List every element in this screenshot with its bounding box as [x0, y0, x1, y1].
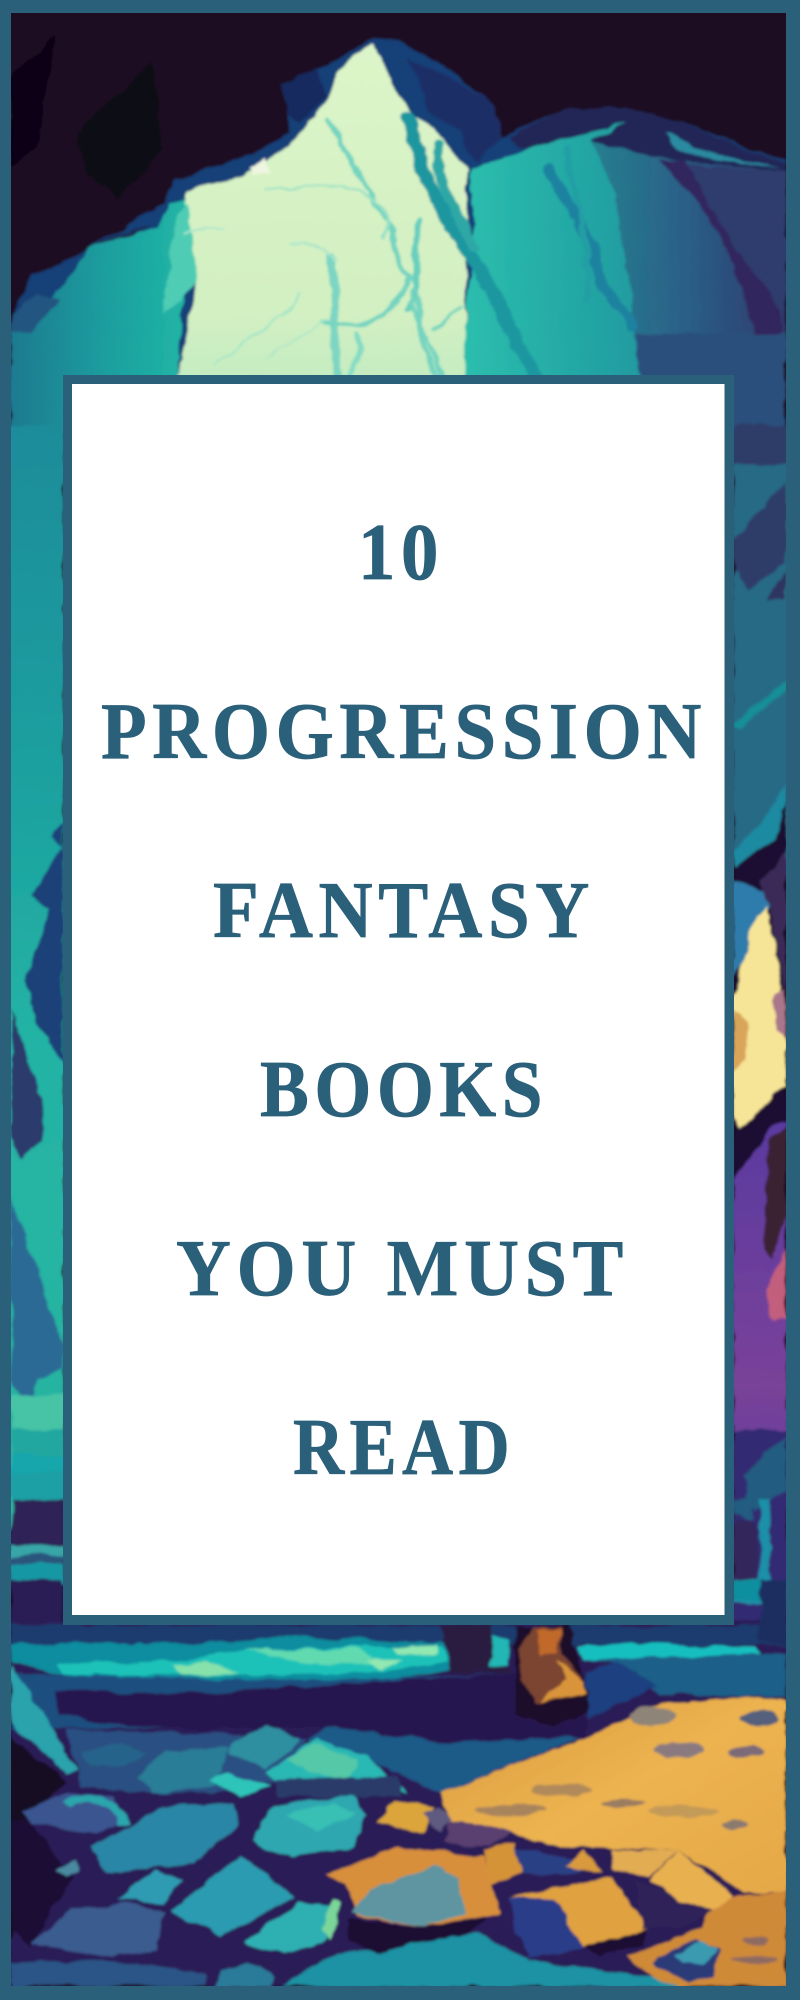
title line: PROGRESSION: PROGRESSION — [101, 688, 707, 776]
sand path — [439, 1697, 786, 1987]
title line: 10: 10 — [358, 509, 444, 597]
cave opening with glowing forest — [11, 33, 786, 433]
stones — [11, 1663, 735, 1987]
left strip: teal wall — [0, 425, 64, 1530]
right strip: dark base with teal column — [733, 1430, 787, 1630]
left strip: cloaked figure — [25, 823, 63, 1064]
title line: READ: READ — [293, 1404, 515, 1492]
right strip: dark teal wall — [733, 425, 800, 875]
title panel — [63, 375, 734, 1625]
left strip: ground bands — [11, 1395, 66, 1645]
left strip: blue cloak hem — [11, 1196, 63, 1406]
right strip: figure with flame and purple robe — [733, 782, 786, 1600]
left strip: dark bush — [11, 1007, 43, 1159]
title line: YOU MUST: YOU MUST — [176, 1225, 629, 1313]
title line: FANTASY: FANTASY — [213, 867, 595, 955]
boot — [441, 1625, 589, 1727]
title line: BOOKS: BOOKS — [260, 1046, 548, 1134]
ground with path, boot and stones — [11, 1580, 786, 1987]
